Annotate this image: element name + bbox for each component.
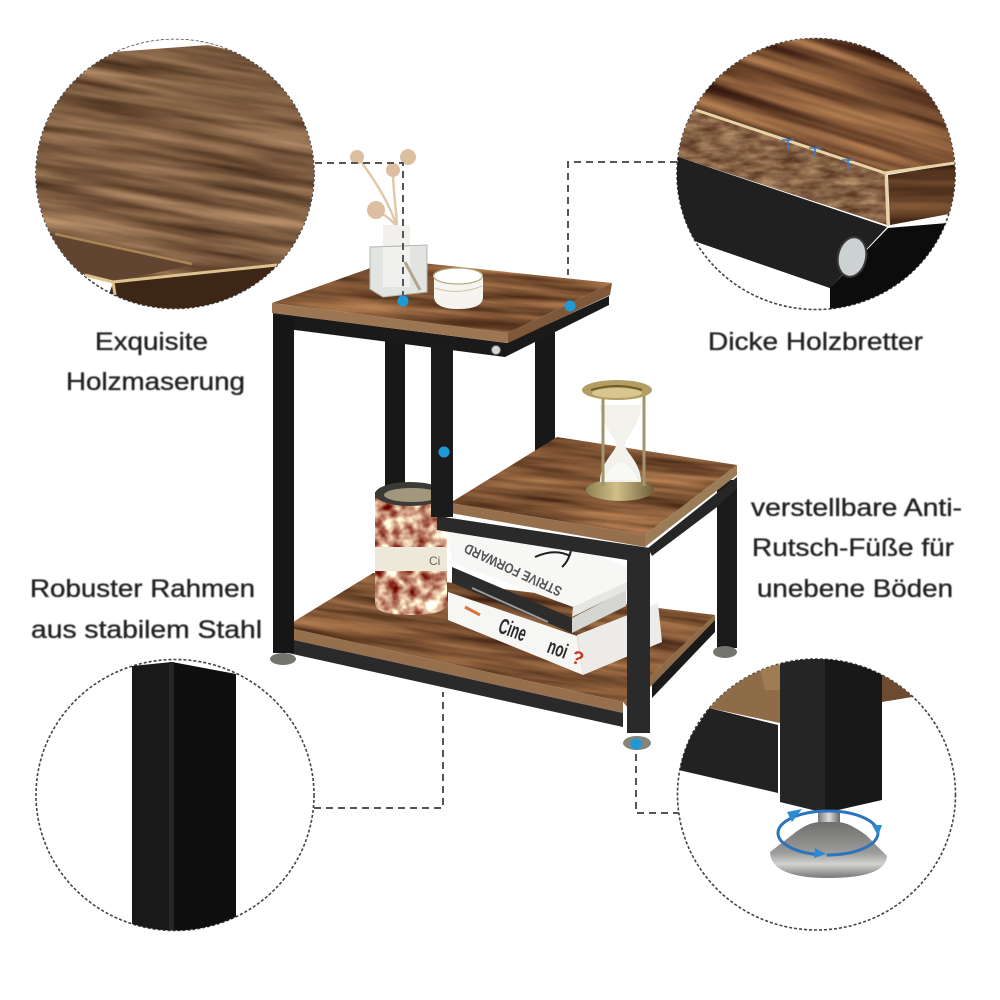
top shelf frame [273,296,609,357]
lower step shelf [453,437,737,547]
black middle book [452,567,626,633]
lower step shelf frame [437,477,737,560]
connector: steel frame detail to leg [314,692,443,808]
tin can [375,482,447,615]
detail circle: steel frame [36,660,314,935]
top white book [447,533,627,607]
connector: thick boards detail to top shelf edge [568,162,677,275]
label: adjustable feet: verstellbare Anti- [751,494,962,522]
detail circle: adjustable foot [670,650,956,930]
front feet [270,653,651,750]
upside-down spine title: STRIVE FORWARD [461,540,564,600]
label: wood grain [66,328,245,396]
wood surface [36,40,314,280]
rear legs [385,325,737,648]
label: thick boards: Dicke Holzbretter [708,328,923,356]
rear feet [713,646,737,658]
detail circle: wood grain [35,38,315,310]
bottom book [577,603,662,675]
label: steel frame [30,575,262,644]
connector: foot detail to table foot [636,752,680,813]
stack of books: noi [544,635,571,664]
label: wood grain: Exquisite [95,328,208,356]
label: steel frame: aus stabilem Stahl [31,616,262,644]
detail circle: thick boards [676,38,956,310]
hourglass [582,380,654,501]
label: adjustable feet [751,494,962,603]
stack of books [447,533,662,675]
cup [434,268,483,309]
blue marker dots [398,296,642,750]
label: wood grain: Holzmaserung [66,368,245,396]
lower book title: Cine [495,613,530,646]
can label: Ci [429,554,440,568]
label: steel frame: Robuster Rahmen [30,575,255,603]
stack of books: ? [568,647,586,671]
label: adjustable feet: Rutsch-Füße für [752,534,954,562]
label: adjustable feet: unebene Böden [757,575,953,603]
top shelf [272,264,612,343]
front legs [273,316,650,733]
vase and dried flowers [350,149,427,297]
bottom shelf [288,573,715,727]
connector: wood grain detail to top shelf [315,163,403,296]
side table product illustration [270,149,737,750]
